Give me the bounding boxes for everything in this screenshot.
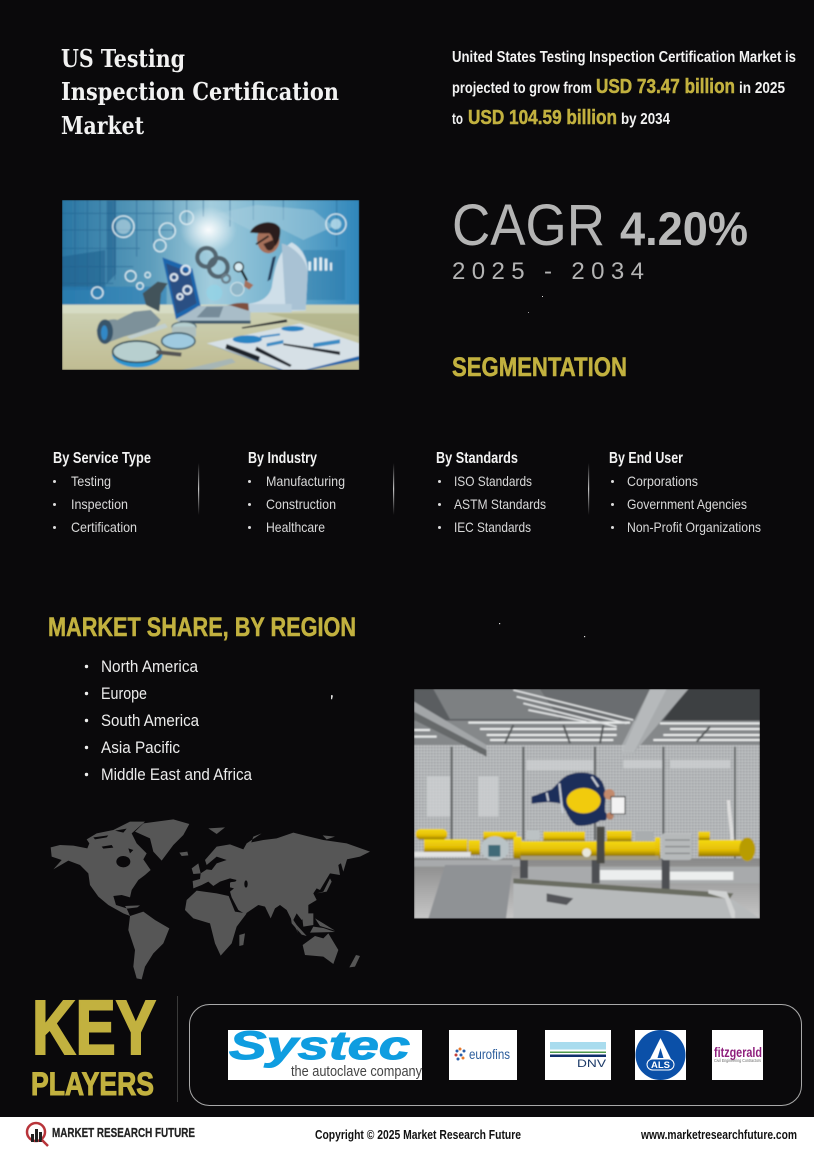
logo: eurofins bbox=[449, 1030, 517, 1080]
market summary text bbox=[452, 49, 796, 129]
market summary text: in 2025 bbox=[739, 80, 785, 97]
region list: South America bbox=[101, 712, 200, 730]
icon: market research future logo bbox=[27, 1123, 48, 1146]
market summary text: by 2034 bbox=[621, 111, 670, 128]
segmentation: by service type bbox=[53, 450, 151, 535]
title: Market bbox=[61, 111, 144, 140]
segmentation: by industry: Construction bbox=[266, 496, 336, 512]
logo: als bbox=[635, 1030, 686, 1080]
specks bbox=[331, 296, 585, 700]
key players panel bbox=[190, 1004, 802, 1106]
logo: systec: Systec bbox=[229, 1024, 410, 1068]
segmentation: by end user: Non-Profit Organizations bbox=[627, 519, 761, 535]
segmentation: by industry bbox=[248, 450, 345, 535]
world map bbox=[51, 819, 370, 979]
logo: dnv bbox=[545, 1030, 611, 1080]
title bbox=[61, 44, 339, 140]
footer: MARKET RESEARCH FUTURE bbox=[52, 1126, 195, 1140]
heading: key players: PLAYERS bbox=[31, 1066, 154, 1102]
worker bbox=[532, 772, 625, 826]
lenses bbox=[111, 350, 164, 368]
market summary text: projected to grow from bbox=[452, 80, 592, 97]
segmentation: by end user bbox=[609, 450, 761, 535]
logo: fitzgerald: fitzgerald bbox=[714, 1044, 762, 1060]
CAGR figure: 2025 - 2034 bbox=[452, 258, 644, 285]
title: Inspection Certification bbox=[61, 77, 339, 106]
logo: fitzgerald: Civil Engineering Contractors bbox=[714, 1058, 762, 1063]
heading: segmentation: SEGMENTATION bbox=[452, 352, 627, 382]
segmentation: by end user: Corporations bbox=[627, 473, 698, 489]
region list: North America bbox=[101, 658, 199, 676]
microscope bbox=[97, 310, 161, 343]
market summary text: USD 73.47 billion bbox=[596, 76, 735, 98]
logo: systec: the autoclave company bbox=[291, 1063, 422, 1080]
segmentation: by standards: IEC Standards bbox=[454, 519, 531, 535]
CAGR figure: CAGR bbox=[452, 193, 605, 258]
region list bbox=[85, 658, 253, 784]
segmentation: by standards: ASTM Standards bbox=[454, 496, 546, 512]
person bbox=[248, 242, 308, 312]
logo: dnv: DNV bbox=[577, 1058, 607, 1070]
image: inspector at laptop bbox=[62, 200, 359, 370]
laptop bbox=[162, 257, 201, 319]
image: inspector over yellow pipeline bbox=[414, 689, 760, 919]
heading: key players: KEY bbox=[32, 985, 156, 1071]
logo: systec bbox=[228, 1024, 422, 1080]
segmentation: by end user: Government Agencies bbox=[627, 496, 747, 512]
segmentation: by end user: By End User bbox=[609, 450, 683, 467]
heading: key players bbox=[31, 985, 156, 1102]
segmentation: by service type: By Service Type bbox=[53, 450, 151, 467]
segmentation: by service type: Inspection bbox=[71, 496, 128, 512]
segmentation: by standards: By Standards bbox=[436, 450, 518, 467]
market summary text: to bbox=[452, 111, 463, 128]
segmentation: by standards bbox=[436, 450, 546, 535]
market summary text: USD 104.59 billion bbox=[468, 107, 617, 129]
pipeline bbox=[414, 800, 755, 863]
segmentation: by service type: Certification bbox=[71, 519, 137, 535]
segmentation: by industry: Manufacturing bbox=[266, 473, 345, 489]
logo: eurofins: eurofins bbox=[469, 1046, 510, 1062]
segmentation: by service type: Testing bbox=[71, 473, 111, 489]
segmentation: by industry: By Industry bbox=[248, 450, 317, 467]
heading: market share by region: MARKET SHARE, BY REGION bbox=[48, 612, 356, 642]
title: US Testing bbox=[61, 44, 185, 73]
clipboard and pens bbox=[207, 323, 359, 370]
region list: Middle East and Africa bbox=[101, 766, 253, 784]
footer bbox=[0, 1117, 814, 1150]
segmentation: by standards: ISO Standards bbox=[454, 473, 532, 489]
logo: als: ALS bbox=[651, 1060, 670, 1071]
logo: fitzgerald bbox=[712, 1030, 763, 1080]
CAGR figure bbox=[452, 193, 748, 285]
footer: Copyright © 2025 Market Research Future bbox=[315, 1127, 521, 1142]
region list: Asia Pacific bbox=[101, 739, 180, 757]
CAGR figure: 4.20% bbox=[620, 202, 748, 255]
segmentation: by industry: Healthcare bbox=[266, 519, 325, 535]
region list: Europe bbox=[101, 685, 147, 703]
